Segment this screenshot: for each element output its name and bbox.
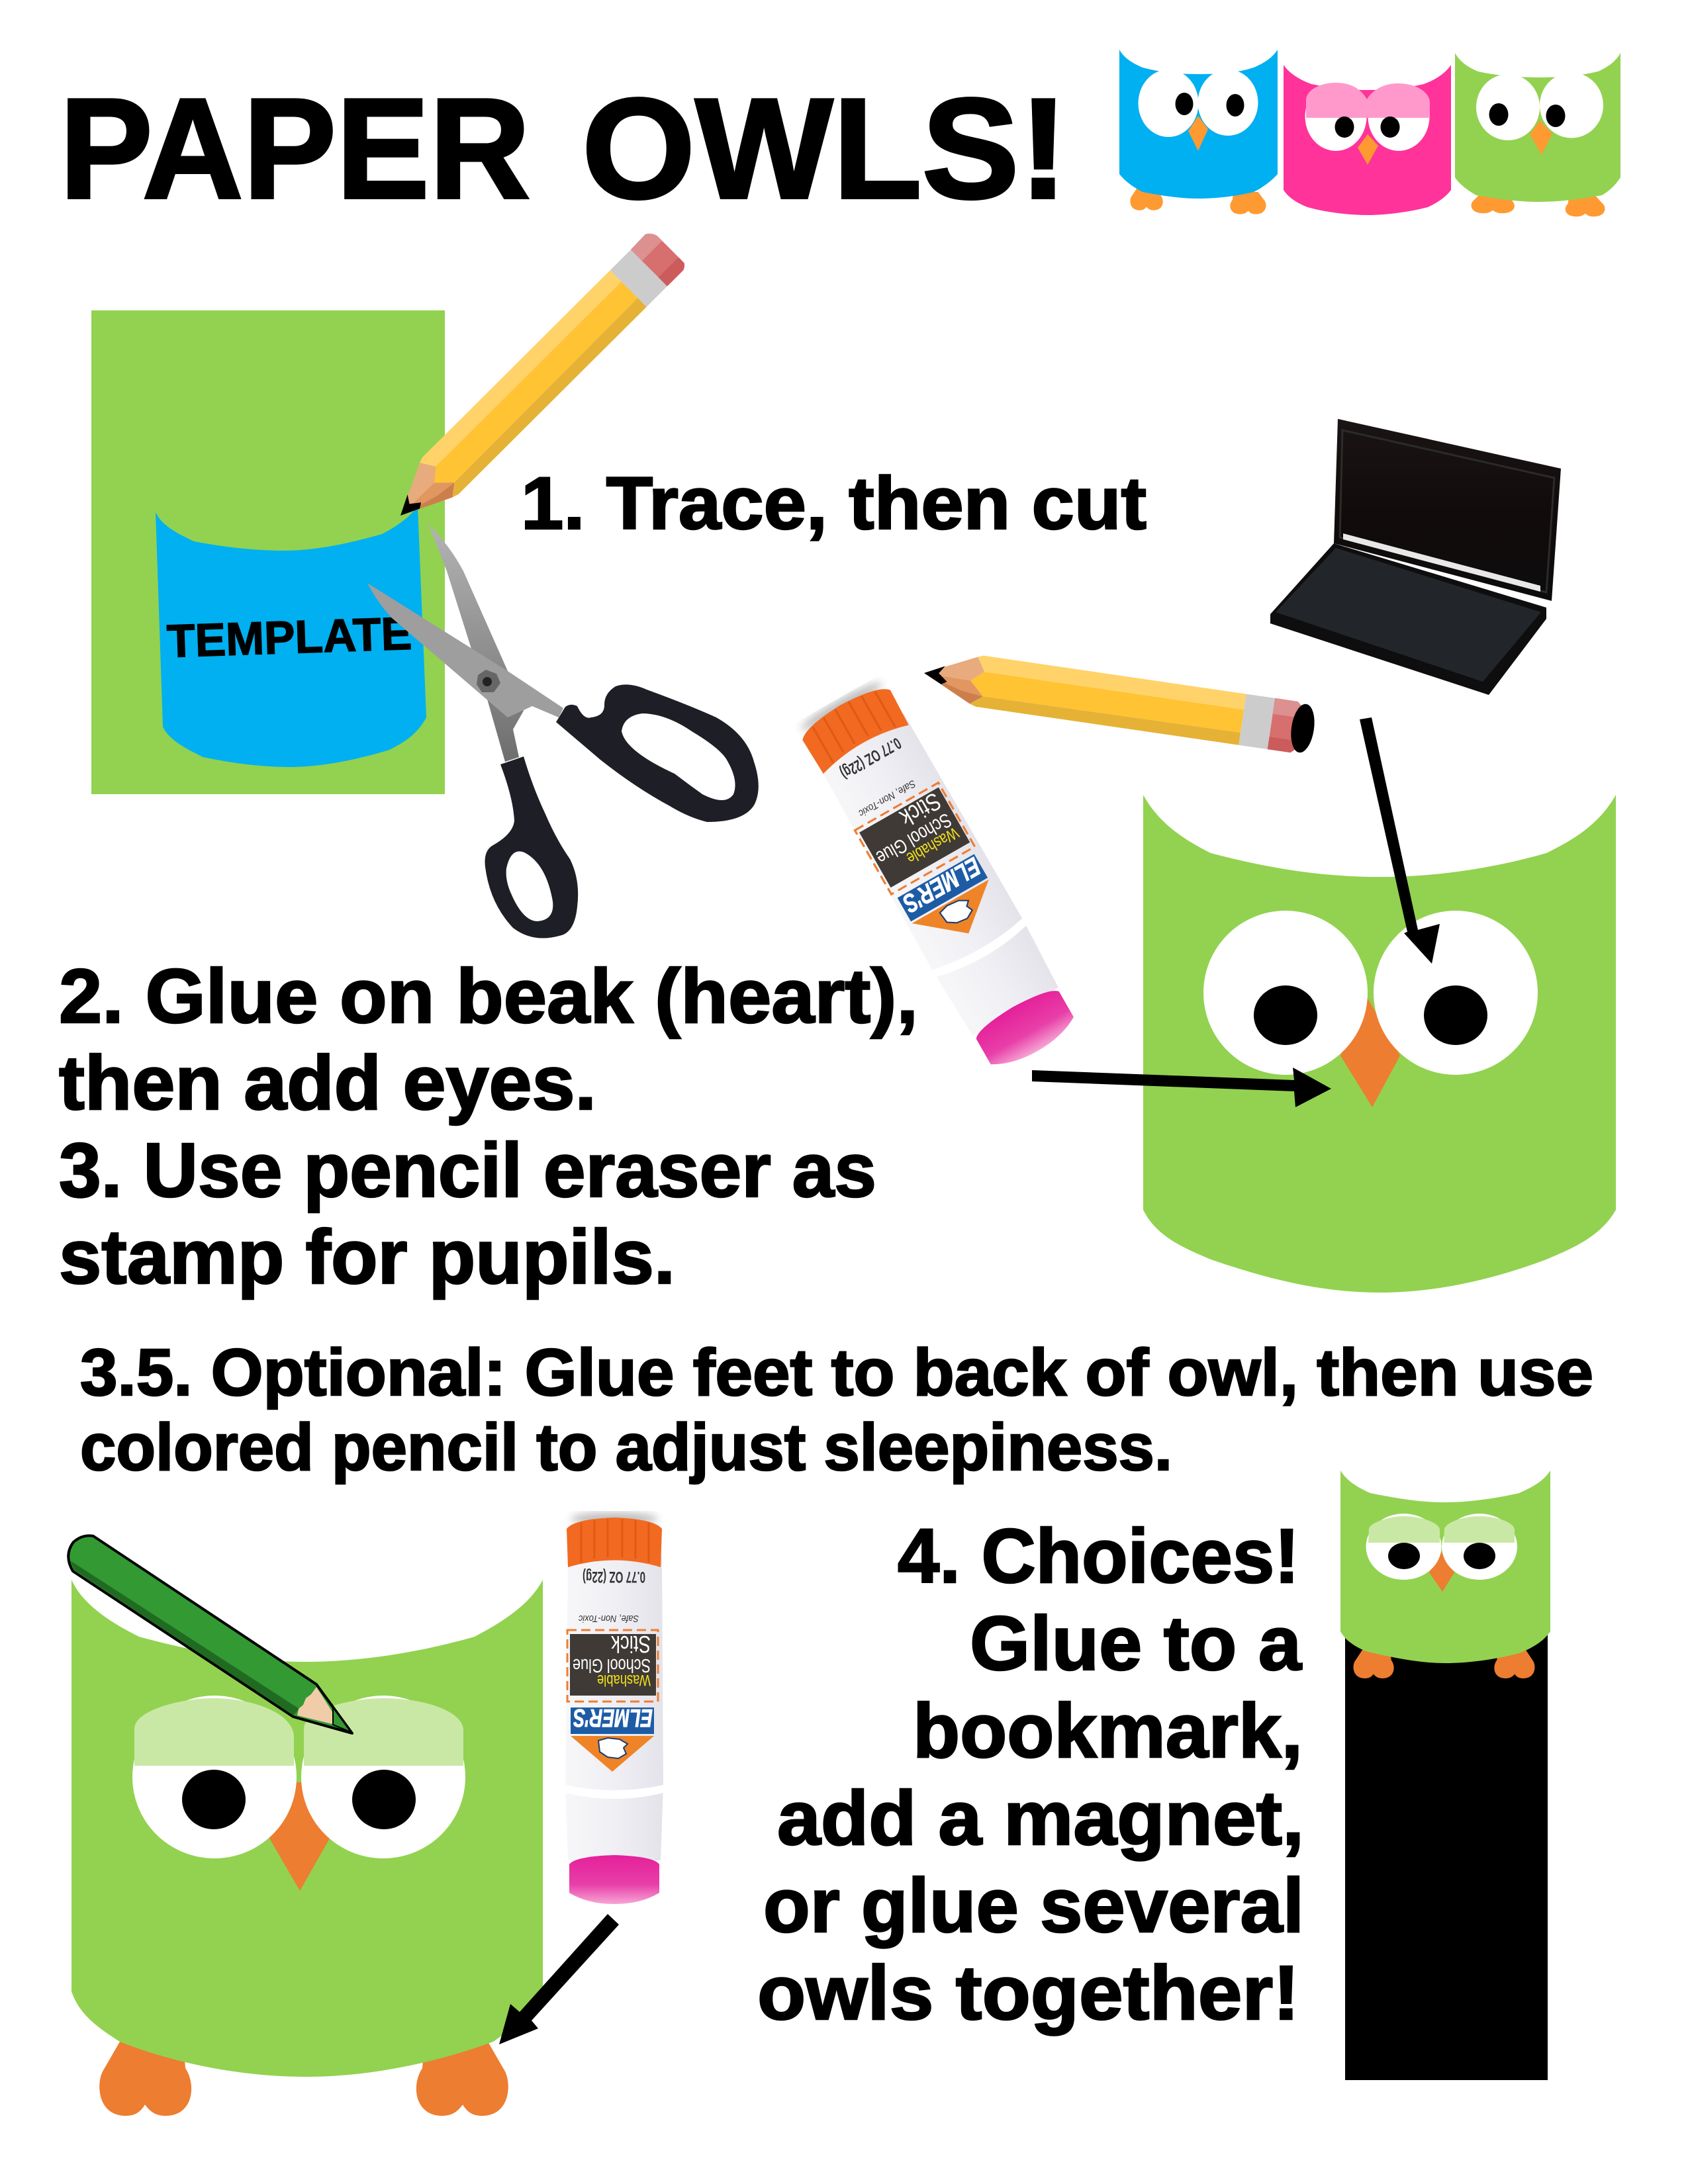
icon: glue stick upright: School Glue — [573, 1655, 651, 1676]
left eye — [132, 1696, 297, 1858]
step 2 and 3 text: 2. Glue on beak (heart), — [59, 953, 918, 1039]
icon: glue stick tilted: 0.77 OZ (22g) — [837, 734, 904, 783]
step 2 and 3 text: 3. Use pencil eraser as — [59, 1127, 876, 1213]
icon: glue stick tilted: ELMER'S — [898, 852, 985, 918]
left eye — [1203, 911, 1368, 1075]
left eyelid — [134, 1698, 294, 1766]
icon: green colored pencil — [68, 1535, 352, 1733]
title: OWLS! — [582, 68, 1068, 228]
left pupil — [182, 1770, 246, 1829]
step 4 text — [757, 1513, 1304, 2036]
icon: yellow pencil with inked eraser — [920, 647, 1317, 755]
icon: glue stick tilted — [793, 674, 1083, 1077]
right pupil — [1424, 985, 1487, 1045]
right eyelid — [304, 1698, 463, 1766]
right foot — [416, 2042, 508, 2116]
title: PAPER — [60, 68, 530, 228]
arrow to foot — [499, 1914, 619, 2044]
black bookmark — [1345, 1635, 1548, 2080]
icon: scissors — [367, 524, 759, 938]
step 3.5 text: 3.5. Optional: Glue feet to back of owl, then use — [80, 1336, 1593, 1410]
beak — [1340, 998, 1400, 1107]
beak — [269, 1782, 330, 1891]
step 1 text: 1. Trace, then cut — [521, 462, 1147, 545]
icon: glue stick upright: ELMER'S — [573, 1704, 653, 1731]
icon: green owl — [1455, 53, 1620, 216]
icon: blue owl — [1119, 50, 1278, 214]
step 4 text: add a magnet, — [777, 1775, 1304, 1861]
body — [71, 1580, 543, 2077]
icon: glue stick upright — [565, 1512, 663, 1904]
step 3.5 text: colored pencil to adjust sleepiness. — [80, 1410, 1172, 1484]
icon: glue stick upright: Stick — [610, 1631, 651, 1658]
step 2 and 3 text: then add eyes. — [59, 1040, 596, 1126]
step 2 and 3 text — [59, 953, 918, 1300]
template label: TEMPLATE — [166, 608, 412, 667]
step 4 text: or glue several — [763, 1862, 1304, 1948]
title — [60, 68, 1068, 228]
arrow to right eye — [1360, 717, 1440, 964]
step 4 text: Glue to a — [970, 1600, 1302, 1686]
blue owl template — [156, 506, 426, 767]
left foot — [99, 2042, 191, 2116]
icon: yellow pencil tracing — [382, 229, 687, 534]
icon: glue stick upright: Washable — [597, 1671, 651, 1689]
right eye — [301, 1696, 465, 1858]
left pupil — [1254, 985, 1317, 1045]
step 2 and 3 text: stamp for pupils. — [59, 1214, 675, 1300]
icon: glue stick upright: Safe, Non-Toxic — [579, 1613, 639, 1624]
icon: glue stick tilted: Stick — [896, 788, 946, 832]
icon: glue stick tilted: Washable — [904, 823, 962, 868]
step 4 text: bookmark, — [913, 1688, 1303, 1774]
large sleepy green owl — [71, 1580, 543, 2116]
icon: pink owl — [1284, 65, 1451, 215]
icon: ink pad — [1270, 419, 1561, 695]
right eye — [1374, 911, 1538, 1075]
arrow to beak — [1032, 1068, 1331, 1107]
icon: glue stick upright: 0.77 OZ (22g) — [583, 1568, 645, 1586]
step 4 text: 4. Choices! — [898, 1513, 1299, 1599]
large green owl with eyes — [1143, 795, 1616, 1293]
icon: glue stick tilted: School Glue — [872, 809, 955, 868]
bookmark owl — [1340, 1471, 1550, 1678]
icon: glue stick tilted: Safe, Non-Toxic — [857, 778, 917, 819]
panel: green paper sheet — [91, 310, 445, 794]
step 4 text: owls together! — [757, 1950, 1299, 2036]
step 3.5 text — [80, 1336, 1593, 1484]
right pupil — [352, 1770, 416, 1829]
